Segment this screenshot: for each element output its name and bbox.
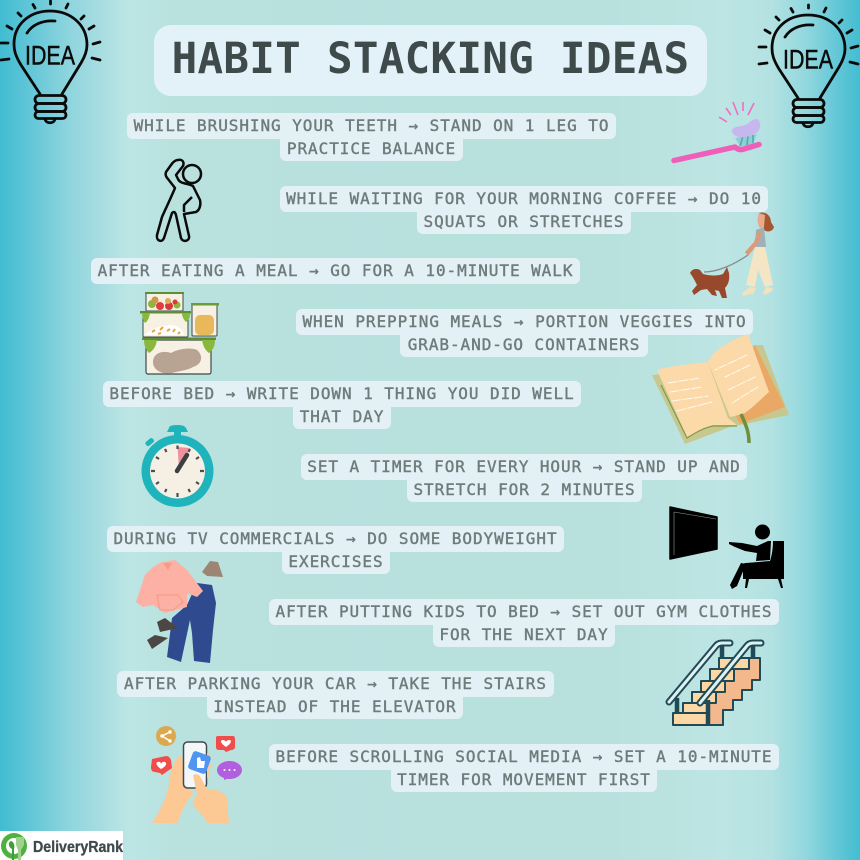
text block: before bed [103, 381, 581, 429]
text block: tv commercials: DURING TV COMMERCIALS → DO SOME BODYWEIGHT [113, 529, 558, 548]
icon: idea light bulb right: IDEA [783, 44, 833, 74]
text block: gym clothes [269, 599, 779, 647]
logo: DeliveryRank [0, 831, 123, 860]
text block: prepping meals: GRAB-AND-GO CONTAINERS [408, 335, 640, 354]
title: HABIT STACKING IDEAS [172, 35, 689, 84]
icon: stairs [669, 643, 761, 725]
text block: social media: TIMER FOR MOVEMENT FIRST [397, 770, 651, 789]
icon: idea light bulb right [759, 5, 858, 127]
icon: gym clothes [136, 560, 223, 663]
text block: hourly timer: STRETCH FOR 2 MINUTES [413, 480, 636, 499]
icon: open book [652, 334, 789, 444]
text block: tv commercials: EXERCISES [288, 552, 384, 571]
text block: brushing teeth [127, 113, 616, 161]
text block: morning coffee: WHILE WAITING FOR YOUR MORNING COFFEE → DO 10 [286, 189, 762, 208]
text block: social media: BEFORE SCROLLING SOCIAL MEDIA → SET A 10-MINUTE [276, 747, 772, 766]
text block: brushing teeth: WHILE BRUSHING YOUR TEETH → STAND ON 1 LEG TO [134, 116, 609, 135]
icon: person watching tv [670, 507, 784, 589]
icon: stopwatch [142, 425, 214, 507]
icon: woman walking dog [690, 213, 774, 298]
title [154, 25, 707, 96]
text block: prepping meals: WHEN PREPPING MEALS → PORTION VEGGIES INTO [302, 312, 747, 331]
icon: idea light bulb left [1, 1, 100, 123]
logo: DeliveryRank: DeliveryRank [33, 839, 123, 856]
text block: before bed: THAT DAY [300, 407, 384, 426]
text block: gym clothes: FOR THE NEXT DAY [439, 625, 609, 644]
text block: parking car [117, 671, 554, 719]
text block: after a meal: AFTER EATING A MEAL → GO FOR A 10-MINUTE WALK [98, 261, 573, 280]
icon: meal prep containers [140, 292, 219, 374]
icon: toothbrush [674, 102, 760, 160]
text block: before bed: BEFORE BED → WRITE DOWN 1 THING YOU DID WELL [109, 384, 575, 403]
text block: brushing teeth: PRACTICE BALANCE [287, 139, 456, 158]
icon: idea light bulb left: IDEA [25, 40, 75, 70]
text block: hourly timer: SET A TIMER FOR EVERY HOUR → STAND UP AND [307, 457, 741, 476]
text block: prepping meals [296, 309, 753, 357]
text block: social media [269, 744, 779, 792]
text block: morning coffee: SQUATS OR STRETCHES [424, 212, 624, 231]
text block: tv commercials [107, 526, 564, 574]
text block: gym clothes: AFTER PUTTING KIDS TO BED → SET OUT GYM CLOTHES [276, 602, 772, 621]
text block: parking car: INSTEAD OF THE ELEVATOR [213, 697, 457, 716]
text block: hourly timer [301, 454, 747, 502]
icon: phone and social media [151, 726, 242, 823]
text block: parking car: AFTER PARKING YOUR CAR → TAKE THE STAIRS [124, 674, 547, 693]
icon: stretching person [157, 160, 201, 241]
text block: morning coffee [280, 186, 768, 234]
